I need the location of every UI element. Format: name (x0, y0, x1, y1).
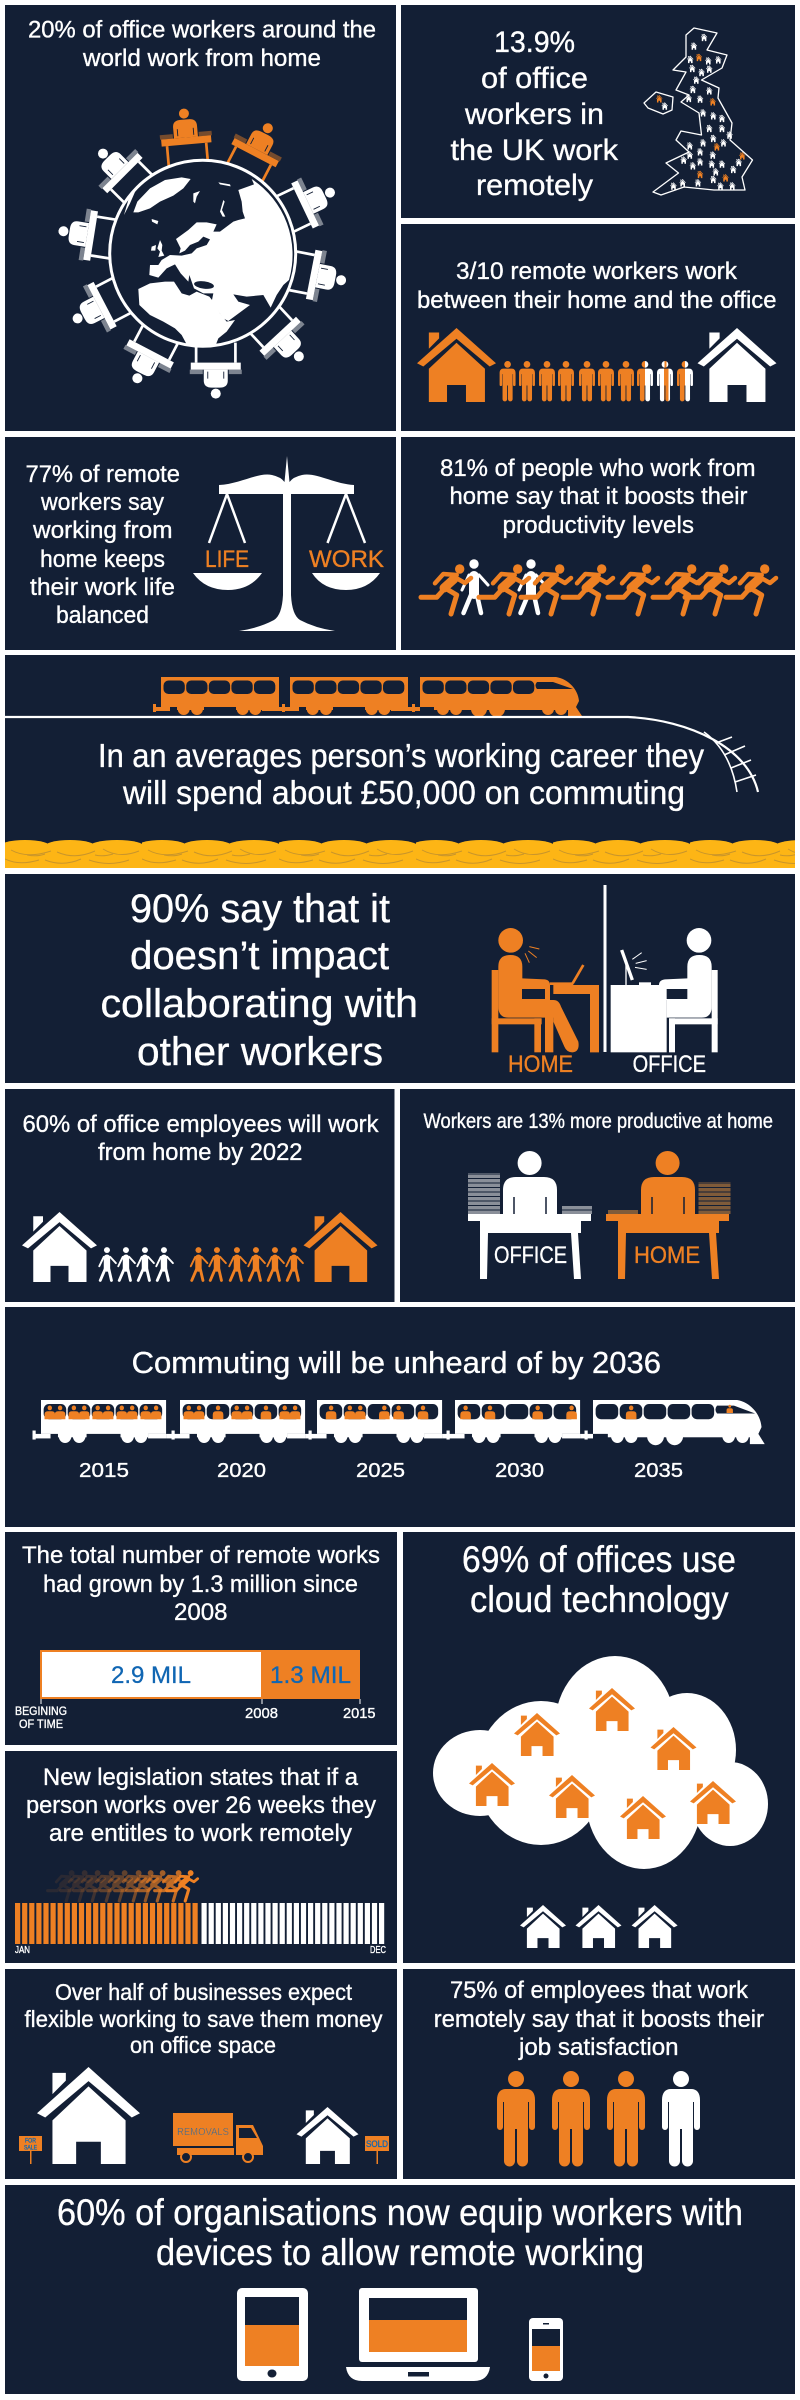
heading: 90% collaboration: collaborating with (100, 982, 418, 1026)
icon: UK map with houses (644, 28, 752, 195)
heading: 20% of office workers: 20% of office workers around the (28, 16, 376, 44)
icon: balance scales (193, 456, 384, 631)
heading: 60% of office employees (22, 1111, 379, 1166)
heading: 20% of office workers (28, 16, 376, 72)
bar chart: 2.9 and 1.3 million (40, 1650, 360, 1704)
axis labels (15, 1704, 376, 1731)
heading: 3/10 remote workers: 3/10 remote workers work (456, 258, 738, 285)
heading: commuting cost (98, 737, 704, 811)
divider between home and office (604, 885, 606, 1052)
year labels: 2035 (634, 1459, 683, 1482)
icon: removals truck (173, 2113, 263, 2162)
axis labels: 2015 (343, 1705, 376, 1722)
heading: total number of remote workers: 2008 (174, 1599, 228, 1626)
icon: small office (296, 2107, 358, 2164)
year labels: 2025 (356, 1459, 405, 1482)
heading: 3/10 remote workers (417, 258, 776, 314)
heading: total number of remote workers: The total number of remote works (22, 1542, 380, 1569)
icon: for sale sign (19, 2136, 42, 2164)
icon: home desk worker (606, 1151, 729, 1279)
icon: home worker at laptop (492, 928, 599, 1052)
icon: globe with workers at desks (54, 106, 351, 399)
bar chart: 2.9 and 1.3 million: 1.3 MIL (270, 1662, 351, 1689)
heading: 81% of people: productivity levels (502, 512, 694, 539)
heading: 77% of remote workers: 77% of remote (26, 461, 180, 488)
axis labels: BEGINING (15, 1704, 67, 1718)
heading: commuting cost: In an averages person’s working career they (98, 737, 704, 774)
icon: office worker at computer (611, 928, 718, 1052)
heading: 60% of office employees: 60% of office employees will work (22, 1111, 379, 1138)
heading: 90% collaboration: 90% say that it (130, 887, 390, 931)
panel: 90% collaboration (5, 874, 795, 1083)
heading: 3/10 remote workers: between their home and the office (417, 287, 776, 314)
heading: 90% collaboration: doesn’t impact (130, 934, 389, 978)
heading: 13.9% of office workers in the UK: of office (481, 62, 588, 95)
icon: sold sign (365, 2136, 389, 2164)
heading: new legislation: are entitles to work remotely (49, 1820, 352, 1847)
panel: 13% more productive (400, 1089, 795, 1302)
heading: 13.9% of office workers in the UK: workers in (464, 98, 604, 131)
heading: 75% of employees: remotely say that it boosts their (434, 2006, 764, 2033)
panel: 60% by 2022 (5, 1089, 394, 1302)
heading: 77% of remote workers: balanced (56, 602, 149, 629)
heading: 69% of offices: 69% of offices use (462, 1539, 736, 1580)
icon: cloud (433, 1656, 768, 1869)
heading: 60% of organisations (57, 2192, 743, 2273)
panel: 75% job satisfaction (403, 1969, 795, 2179)
icon: white office (22, 1212, 97, 1282)
panel: growth of remote workers (5, 1532, 397, 1745)
label: home: HOME (508, 1051, 573, 1078)
panel: commuting by 2036 (5, 1307, 795, 1527)
heading: over half of businesses: on office space (130, 2032, 276, 2058)
panel: 77% life work balance (5, 437, 396, 650)
heading: 60% of organisations: 60% of organisations now equip workers with (57, 2192, 743, 2233)
icon: phone (529, 2318, 563, 2381)
icon: large office (37, 2067, 140, 2164)
label: office: OFFICE (633, 1051, 706, 1078)
panel: 69% cloud technology (403, 1532, 795, 1963)
heading: new legislation (26, 1764, 376, 1847)
heading: 77% of remote workers (26, 461, 180, 629)
heading: 90% collaboration (100, 887, 418, 1074)
chart: weeks of the year (15, 1903, 386, 1956)
heading: 77% of remote workers: their work life (30, 574, 175, 601)
heading: 69% of offices (462, 1539, 736, 1620)
panel: 3/10 remote workers (401, 224, 795, 431)
bar chart: 2.9 and 1.3 million: 2.9 MIL (111, 1662, 191, 1689)
year labels (79, 1459, 683, 1482)
icon: white office (698, 328, 776, 402)
heading: new legislation: New legislation states that if a (43, 1764, 359, 1791)
label: life: LIFE (205, 546, 249, 573)
year labels: 2015 (79, 1459, 129, 1482)
heading: total number of remote workers: had grown by 1.3 million since (43, 1571, 358, 1598)
icons: houses outside the cloud (520, 1905, 678, 1948)
year labels: 2030 (495, 1459, 544, 1482)
icon: tablet (237, 2288, 308, 2381)
heading: 77% of remote workers: working from (32, 517, 173, 544)
heading: 75% of employees: 75% of employees that work (450, 1977, 749, 2004)
axis labels: 2008 (245, 1705, 278, 1722)
icon: for sale sign: SALE (24, 2146, 37, 2152)
icon: pile of gold coins (5, 840, 795, 868)
heading: 81% of people: 81% of people who work from (440, 455, 756, 482)
chart: weeks of the year: DEC (370, 1945, 386, 1956)
heading: commuting unheard of: Commuting will be unheard of by 2036 (132, 1345, 661, 1380)
icons: houses in the cloud (469, 1688, 736, 1839)
icon: orange train (153, 677, 582, 717)
icon: orange home (304, 1212, 378, 1282)
heading: 13.9% of office workers in the UK: the UK work (450, 134, 619, 167)
panel: 60% devices (5, 2185, 795, 2394)
heading: 90% collaboration: other workers (137, 1030, 383, 1074)
icon: for sale sign: FOR (25, 2138, 37, 2144)
heading: 75% of employees: job satisfaction (518, 2034, 679, 2061)
heading: over half of businesses: Over half of businesses expect (55, 1979, 353, 2005)
heading: 60% of office employees: from home by 2022 (98, 1139, 302, 1166)
heading: total number of remote workers (22, 1542, 380, 1626)
icon: railway track (5, 717, 758, 792)
year labels: 2020 (217, 1459, 266, 1482)
icon: train with falling passengers (33, 1400, 765, 1445)
heading: commuting cost: will spend about £50,000 on commuting (122, 774, 685, 811)
chart: weeks of the year: JAN (15, 1945, 30, 1956)
icon: orange walkers (191, 1247, 303, 1280)
heading: 77% of remote workers: workers say (40, 489, 164, 516)
heading: 13.9% of office workers in the UK: remotely (476, 169, 593, 202)
axis labels: OF TIME (19, 1717, 63, 1731)
icon: orange home (417, 328, 496, 402)
icon: office desk worker (468, 1151, 591, 1279)
panel: new legislation (5, 1751, 397, 1963)
label: office: OFFICE (494, 1242, 567, 1269)
panel: 81% productivity (401, 437, 795, 650)
icon: runner with fading trail (48, 1870, 198, 1901)
heading: 81% of people: home say that it boosts their (450, 483, 748, 510)
heading: 77% of remote workers: home keeps (40, 546, 165, 573)
icon: row of ten workers (500, 361, 693, 401)
icon: laptop (346, 2288, 490, 2381)
heading: over half of businesses: flexible working to save them money (24, 2006, 383, 2032)
label: home: HOME (634, 1242, 700, 1269)
heading: 81% of people (440, 455, 756, 539)
heading: 75% of employees (434, 1977, 764, 2061)
heading: over half of businesses (24, 1979, 383, 2058)
heading: new legislation: person works over 26 weeks they (26, 1792, 376, 1819)
heading: 20% of office workers: world work from home (82, 45, 321, 72)
icon: white walkers (99, 1247, 173, 1280)
icon: four employees (497, 2071, 700, 2166)
panel: office space savings (5, 1969, 397, 2179)
panel: 20% of office workers (5, 5, 396, 431)
heading: 69% of offices: cloud technology (470, 1579, 729, 1620)
heading: 60% of organisations: devices to allow remote working (156, 2232, 644, 2273)
heading: 13.9% of office workers in the UK: 13.9% (494, 26, 575, 59)
icon: runners and walkers (421, 559, 776, 614)
panel: commuting cost (5, 655, 795, 868)
panel: 13.9% UK (401, 5, 795, 218)
heading: 13.9% of office workers in the UK (450, 26, 619, 202)
label: work: WORK (309, 546, 384, 573)
icon: removals truck: REMOVALS (177, 2127, 229, 2138)
icon: sold sign: SOLD (366, 2139, 388, 2149)
